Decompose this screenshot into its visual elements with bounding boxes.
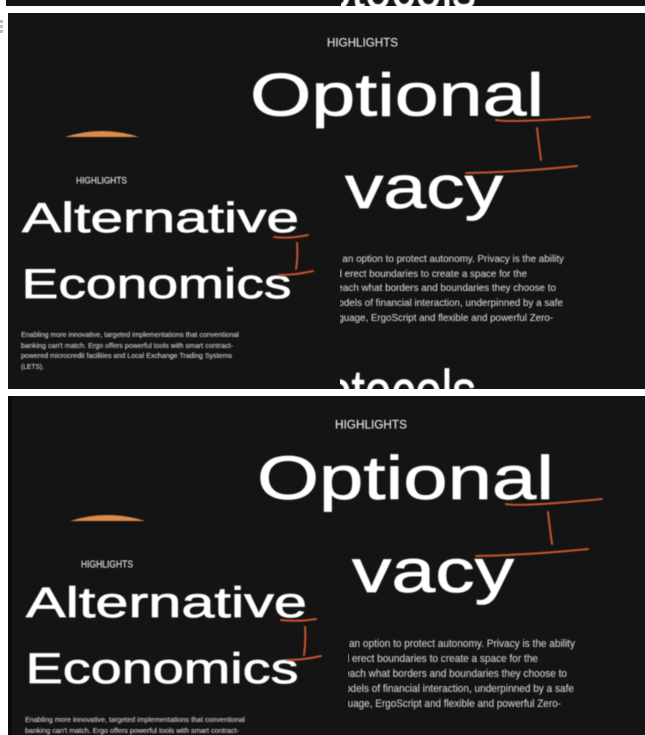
text block: economics description: powered microcredit facilities and Local Exchange Trading Systems <box>21 351 232 360</box>
heading: economics: Economics <box>26 645 298 693</box>
panel: bottom slide <box>8 396 645 735</box>
heading: optional: Optional <box>250 62 544 128</box>
annotation: optional red marks <box>466 117 590 173</box>
icon: side handle dots <box>0 20 3 33</box>
heading: economics: Economics <box>22 260 292 307</box>
icon: orange arc <box>65 131 139 137</box>
text block: economics description <box>25 715 245 735</box>
text block: privacy description: and erect boundaries to create a space for the <box>332 654 538 665</box>
label: right highlights: HIGHLIGHTS <box>327 36 398 50</box>
text block: privacy description: reach what borders and boundaries they choose to <box>334 283 556 294</box>
annotation: alternative red marks <box>281 619 321 660</box>
label: left highlights: HIGHLIGHTS <box>76 176 127 186</box>
heading: alternative: Alternative <box>26 579 307 627</box>
text block: economics description: (LETS). <box>21 362 44 371</box>
heading: optional: Optional <box>257 444 554 512</box>
text block: economics description: Enabling more innovative, targeted implementations that conventional <box>21 330 239 339</box>
text block: privacy description: an option to protect autonomy. Privacy is the ability <box>349 639 576 650</box>
text block: privacy description: and erect boundaries to create a space for the <box>325 269 527 280</box>
heading: alternative: Alternative <box>22 194 299 241</box>
text block: privacy description: language, ErgoScript and flexible and powerful Zero- <box>329 699 561 710</box>
text block: economics description <box>21 330 239 371</box>
text block: privacy description: language, ErgoScript and flexible and powerful Zero- <box>325 313 553 324</box>
text block: privacy description: models of financial interaction, underpinned by a safe <box>330 298 563 309</box>
heading: vacy: vacy <box>345 154 503 221</box>
label: left highlights: HIGHLIGHTS <box>81 560 133 570</box>
icon: orange arc <box>70 515 145 521</box>
text block: privacy description: an option to protect autonomy. Privacy is the ability <box>342 254 565 265</box>
annotation: alternative red marks <box>274 235 313 275</box>
label: right highlights: HIGHLIGHTS <box>335 418 407 432</box>
text block: economics description: Enabling more innovative, targeted implementations that conventional <box>25 715 245 724</box>
text block: privacy description: models of financial interaction, underpinned by a safe <box>337 684 574 695</box>
heading: protocols cropped: otocols <box>325 358 476 425</box>
panel: middle slide <box>8 13 645 425</box>
text block: privacy description <box>325 254 565 324</box>
text block: privacy description <box>329 639 576 710</box>
heading: vacy: vacy <box>352 537 515 605</box>
text block: economics description: banking can't match. Ergo offers powerful tools with smart contract- <box>25 726 240 735</box>
annotation: optional red marks <box>476 499 602 556</box>
text block: privacy description: reach what borders and boundaries they choose to <box>341 669 567 680</box>
text block: economics description: banking can't match. Ergo offers powerful tools with smart contract- <box>21 341 234 350</box>
panel: cropped top slide <box>6 0 645 6</box>
